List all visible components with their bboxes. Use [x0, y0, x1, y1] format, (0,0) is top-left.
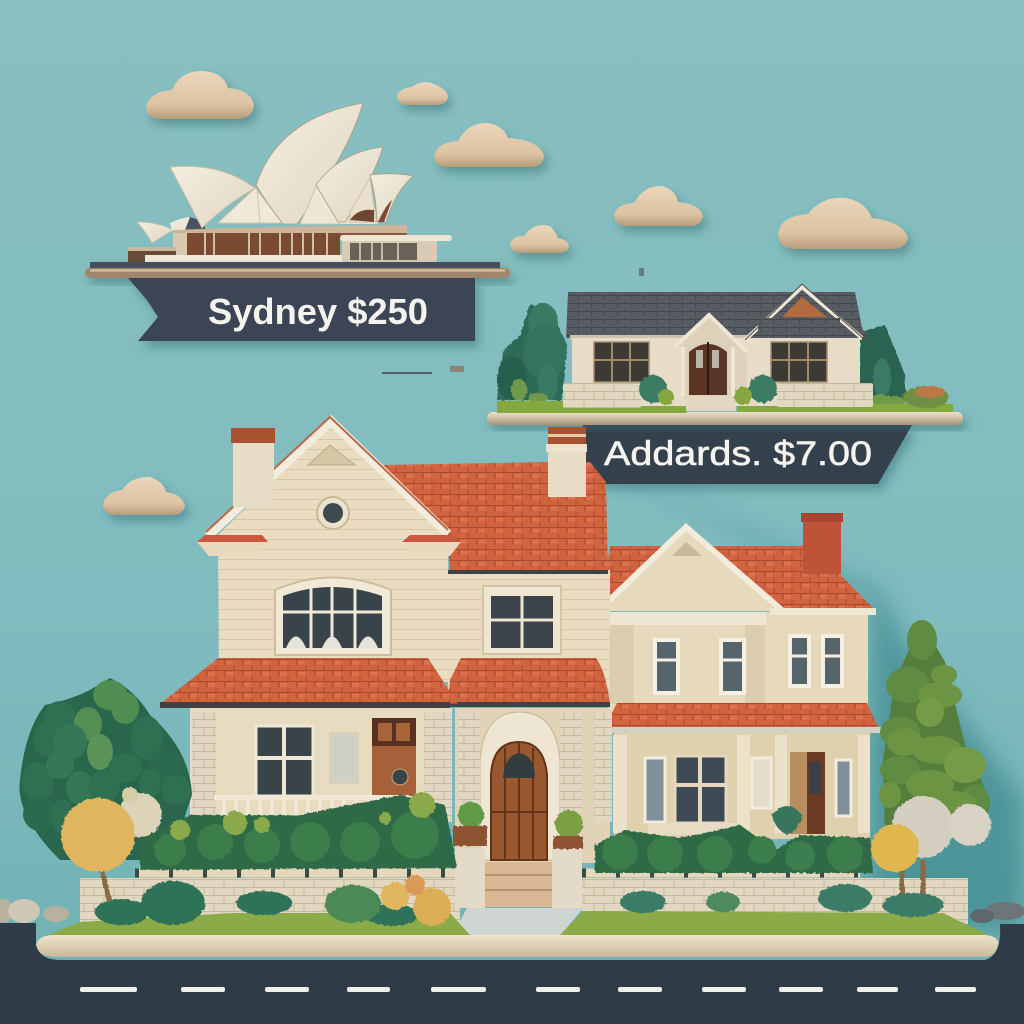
grass — [497, 401, 953, 413]
price banner — [128, 278, 475, 341]
center section — [383, 427, 612, 863]
road — [0, 923, 1024, 1024]
Adelaide panel — [487, 284, 963, 484]
left tree — [497, 303, 567, 403]
house — [563, 284, 949, 411]
right tree — [879, 620, 990, 835]
flowering trees — [61, 787, 991, 903]
platform — [85, 262, 510, 278]
upper windows — [655, 636, 842, 693]
main house — [160, 417, 881, 863]
clouds — [103, 71, 908, 515]
small marks — [382, 268, 644, 374]
right tree — [860, 325, 906, 406]
price label: Sydney $250 — [208, 291, 428, 332]
price label: Addards. $7.00 — [604, 435, 872, 473]
house shadow on wall — [610, 470, 1024, 930]
right wing — [597, 513, 881, 839]
price banner — [583, 425, 912, 484]
left tree — [20, 678, 192, 860]
lawn and pavement — [36, 908, 999, 957]
left gable — [160, 417, 461, 827]
stone wall — [80, 848, 968, 924]
front shrubs — [95, 875, 944, 926]
pebbles — [0, 899, 1024, 923]
hedges — [140, 792, 873, 873]
Sydney Opera House — [128, 103, 452, 263]
Sydney panel — [85, 103, 510, 341]
platform — [487, 412, 963, 425]
